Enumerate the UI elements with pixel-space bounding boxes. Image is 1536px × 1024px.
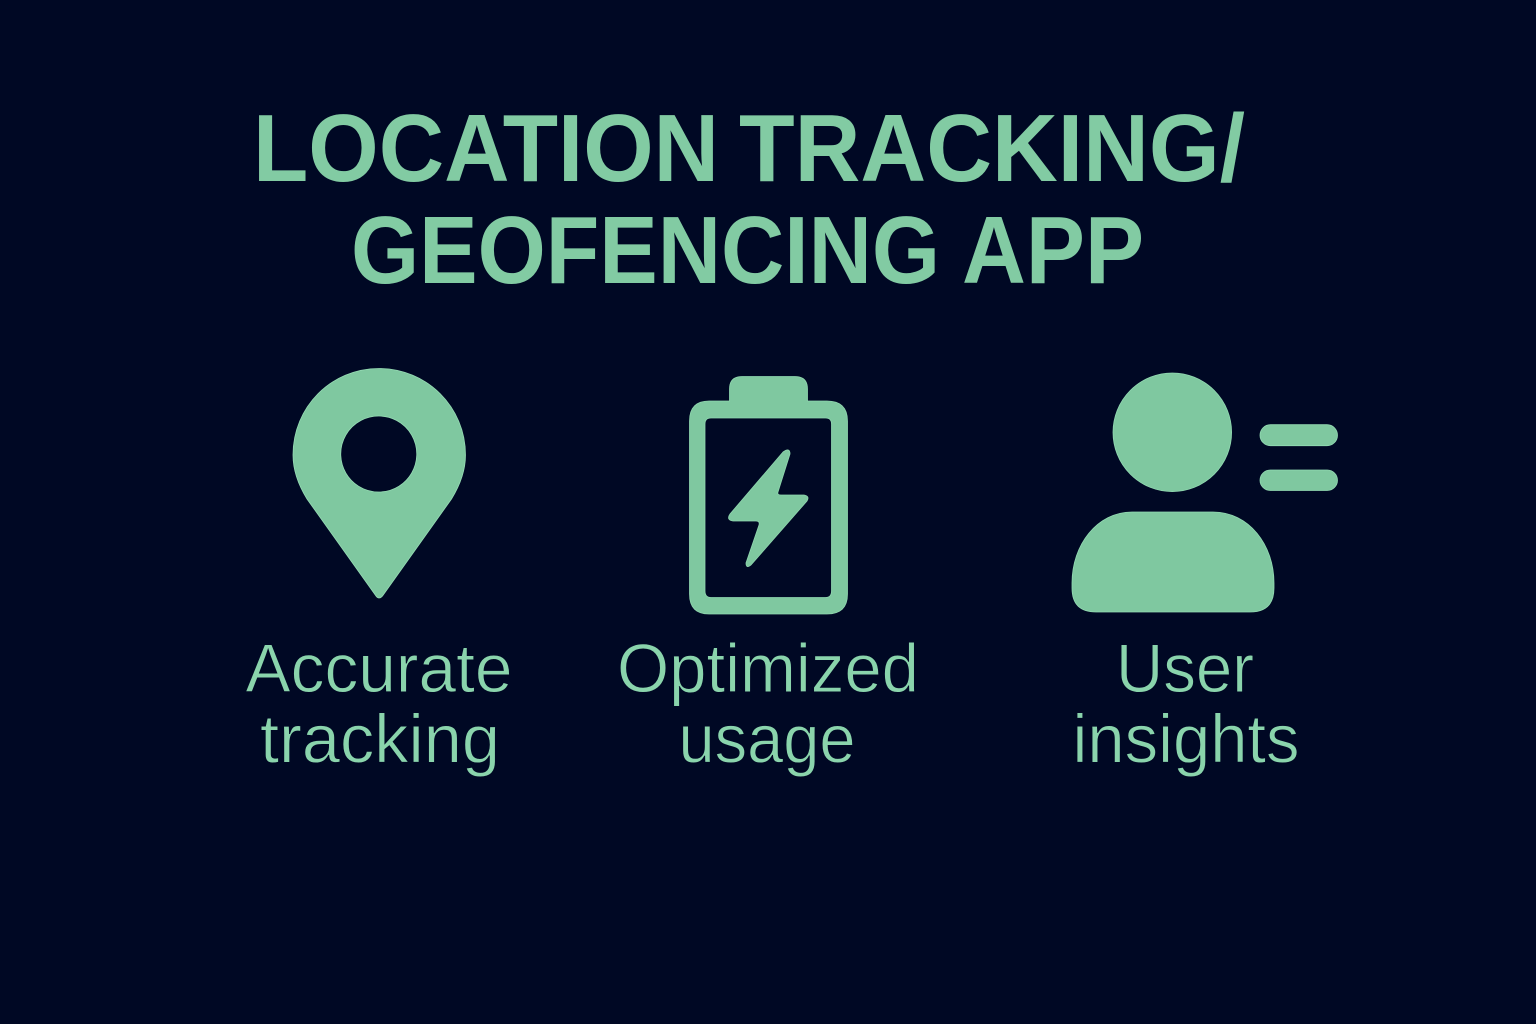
label: user insights: User xyxy=(1116,630,1254,707)
user head xyxy=(1113,373,1232,492)
label: accurate tracking: Accurate xyxy=(246,630,512,707)
list lines xyxy=(1260,425,1338,490)
title: GEOFENCING xyxy=(351,197,940,304)
title: TRACKING/ xyxy=(739,95,1245,202)
icon: user with lines xyxy=(1072,373,1338,612)
label: accurate tracking: tracking xyxy=(260,700,500,778)
label: optimized usage xyxy=(617,630,919,778)
title xyxy=(253,95,1245,304)
label: accurate tracking xyxy=(246,630,512,778)
user body xyxy=(1072,512,1274,612)
title: LOCATION xyxy=(253,95,719,202)
label: user insights xyxy=(1072,630,1300,778)
icon: battery with lightning bolt xyxy=(690,376,848,614)
icon: location pin xyxy=(293,368,466,598)
label: optimized usage: usage xyxy=(678,700,856,778)
label: user insights: insights xyxy=(1072,700,1300,778)
title: APP xyxy=(962,197,1144,304)
label: optimized usage: Optimized xyxy=(617,630,919,707)
